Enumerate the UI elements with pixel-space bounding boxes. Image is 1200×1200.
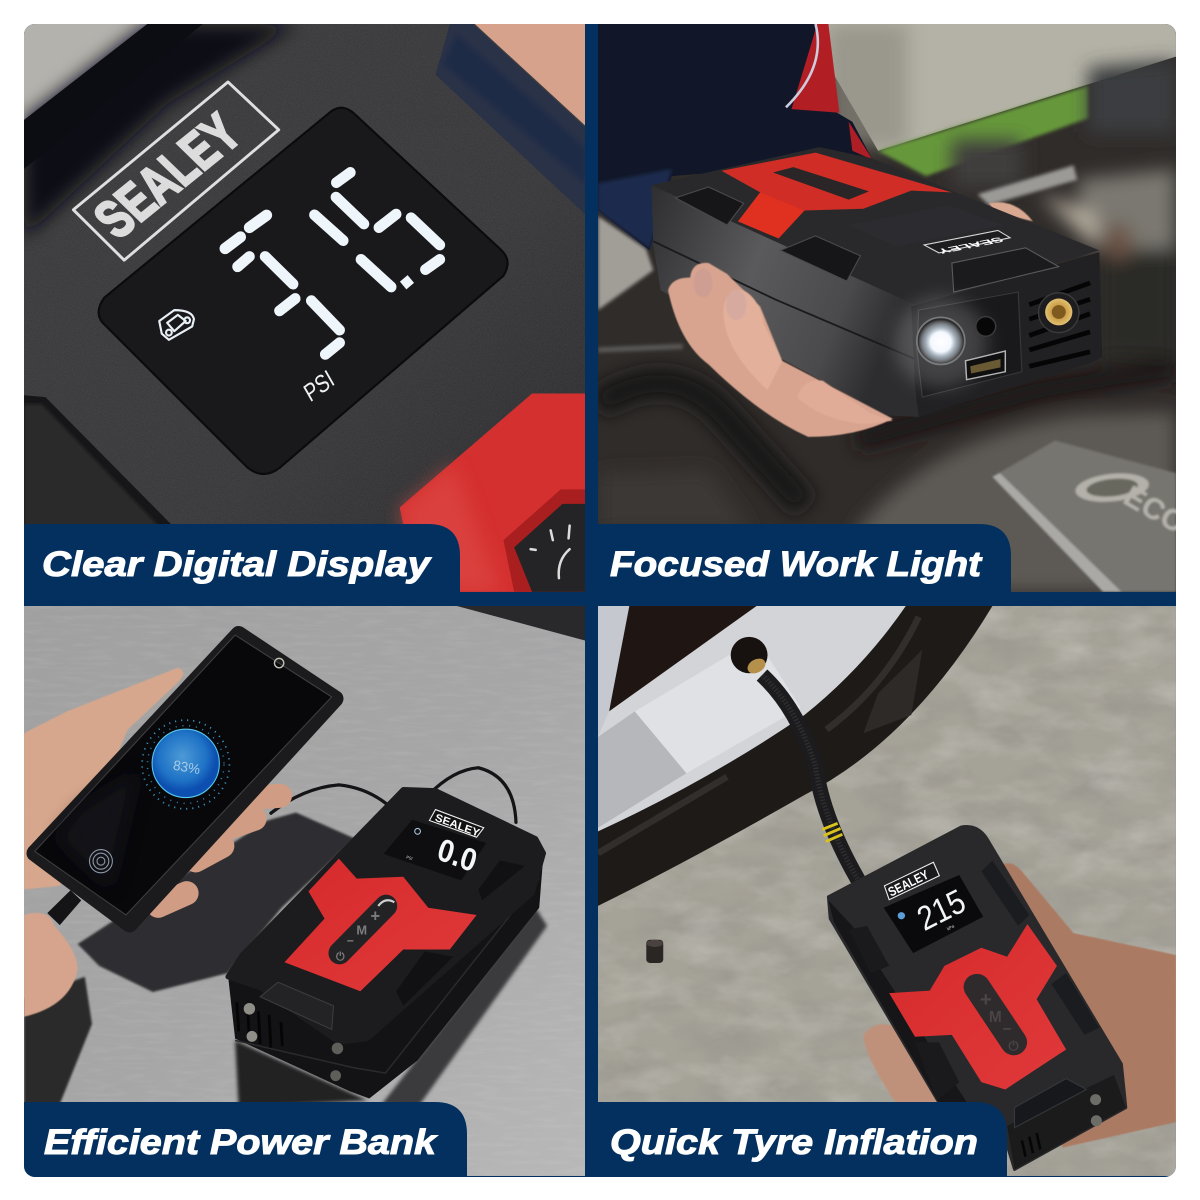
icon: brass air connector xyxy=(1038,293,1079,333)
caption tab: quick tyre inflation: Quick Tyre Inflation xyxy=(610,1123,978,1162)
charging indicator: 83% xyxy=(172,758,201,777)
lower hand pinching cable xyxy=(24,913,78,1017)
icon: car xyxy=(159,310,194,340)
tyre xyxy=(598,606,992,906)
icon: lit LED torch xyxy=(895,297,987,388)
control buttons: M xyxy=(989,1009,1002,1026)
hand holding device xyxy=(668,202,1033,437)
garage wall xyxy=(804,24,1176,151)
icon: fingerprint xyxy=(89,850,112,873)
product: device held in hand xyxy=(828,827,1126,1169)
small display: 215 xyxy=(912,883,971,939)
background surface top left xyxy=(24,24,147,120)
front face xyxy=(911,252,1102,417)
panel: quick tyre inflation xyxy=(598,606,1176,1176)
small display xyxy=(849,205,1003,247)
caption tab: efficient power bank xyxy=(24,1102,467,1177)
lit segment digits xyxy=(225,173,440,354)
logo: SEALEY: SEALEY xyxy=(934,235,1006,255)
icon: USB port xyxy=(965,351,1005,380)
small display xyxy=(884,875,983,953)
charging indicator xyxy=(142,720,229,809)
display screen xyxy=(99,108,508,474)
end vents and screws xyxy=(237,1002,343,1081)
icon: DC socket xyxy=(976,317,996,336)
control buttons xyxy=(977,987,1019,1053)
logo: SEALEY: SEALEY xyxy=(433,812,481,840)
product: device angled view xyxy=(651,147,1102,437)
caption tab: focused work light: Focused Work Light xyxy=(610,545,982,584)
engine cover plate with ECO badge: ECO xyxy=(1118,480,1191,540)
phone xyxy=(35,634,335,925)
top face xyxy=(652,147,1099,288)
engine cover plate with ECO badge xyxy=(992,441,1191,592)
lower body xyxy=(228,853,544,1099)
charging cables xyxy=(271,768,516,822)
red control panel xyxy=(284,859,477,991)
blurred engine bay xyxy=(598,60,1176,592)
top body xyxy=(228,790,544,1042)
control buttons: − xyxy=(1003,1021,1012,1038)
valve and air hose xyxy=(731,637,862,886)
hand xyxy=(863,863,1176,1148)
small display: PSI xyxy=(406,854,413,861)
green machinery strip xyxy=(878,86,1088,176)
control buttons: ⏻ xyxy=(336,950,345,963)
control buttons: + xyxy=(371,906,380,926)
panel: clear digital display xyxy=(24,24,585,592)
unit label: PSI xyxy=(299,365,339,407)
small display: kPa xyxy=(946,923,956,931)
control buttons: ⏻ xyxy=(1008,1039,1019,1053)
reflection band on device xyxy=(24,24,296,238)
blue reflective recess xyxy=(435,24,585,214)
logo: SEALEY: SEALEY xyxy=(81,103,254,249)
red control panel xyxy=(721,153,952,238)
table shadow and reflections xyxy=(24,812,547,1108)
logo: SEALEY: SEALEY xyxy=(886,867,931,899)
hand at top right xyxy=(475,24,585,125)
product: device top view xyxy=(228,790,544,1099)
red panel xyxy=(400,393,585,592)
wheel rim xyxy=(598,606,906,831)
port plate xyxy=(917,292,1022,397)
air outlet vents xyxy=(1029,283,1090,366)
control buttons: − xyxy=(347,934,354,948)
caption tab: efficient power bank: Efficient Power Bank xyxy=(44,1123,438,1162)
panel: focused work light xyxy=(598,24,1191,592)
end vents and screws xyxy=(1022,1094,1102,1157)
caption tab: focused work light xyxy=(598,524,1011,592)
red control panel xyxy=(889,924,1066,1089)
left hand behind phone xyxy=(24,668,183,890)
side face xyxy=(651,185,919,417)
light button xyxy=(503,489,585,592)
panel: efficient power bank xyxy=(24,606,585,1176)
USB-C plug xyxy=(47,890,81,925)
control buttons xyxy=(336,900,394,963)
dust cap on ground xyxy=(646,940,663,963)
navy sleeve xyxy=(598,24,873,250)
logo: SEALEY xyxy=(924,230,1010,255)
caption tab: clear digital display: Clear Digital Display xyxy=(42,545,432,584)
caption tab: quick tyre inflation xyxy=(598,1102,1007,1177)
control buttons: M xyxy=(356,923,367,938)
pocket bottom left xyxy=(24,395,174,527)
small display xyxy=(384,820,486,880)
caption tab: clear digital display xyxy=(24,524,460,592)
fingers on phone edge xyxy=(158,796,280,906)
control buttons: + xyxy=(980,988,992,1011)
small display: 0.0 xyxy=(433,831,481,879)
blurred chrome details xyxy=(598,165,1077,350)
